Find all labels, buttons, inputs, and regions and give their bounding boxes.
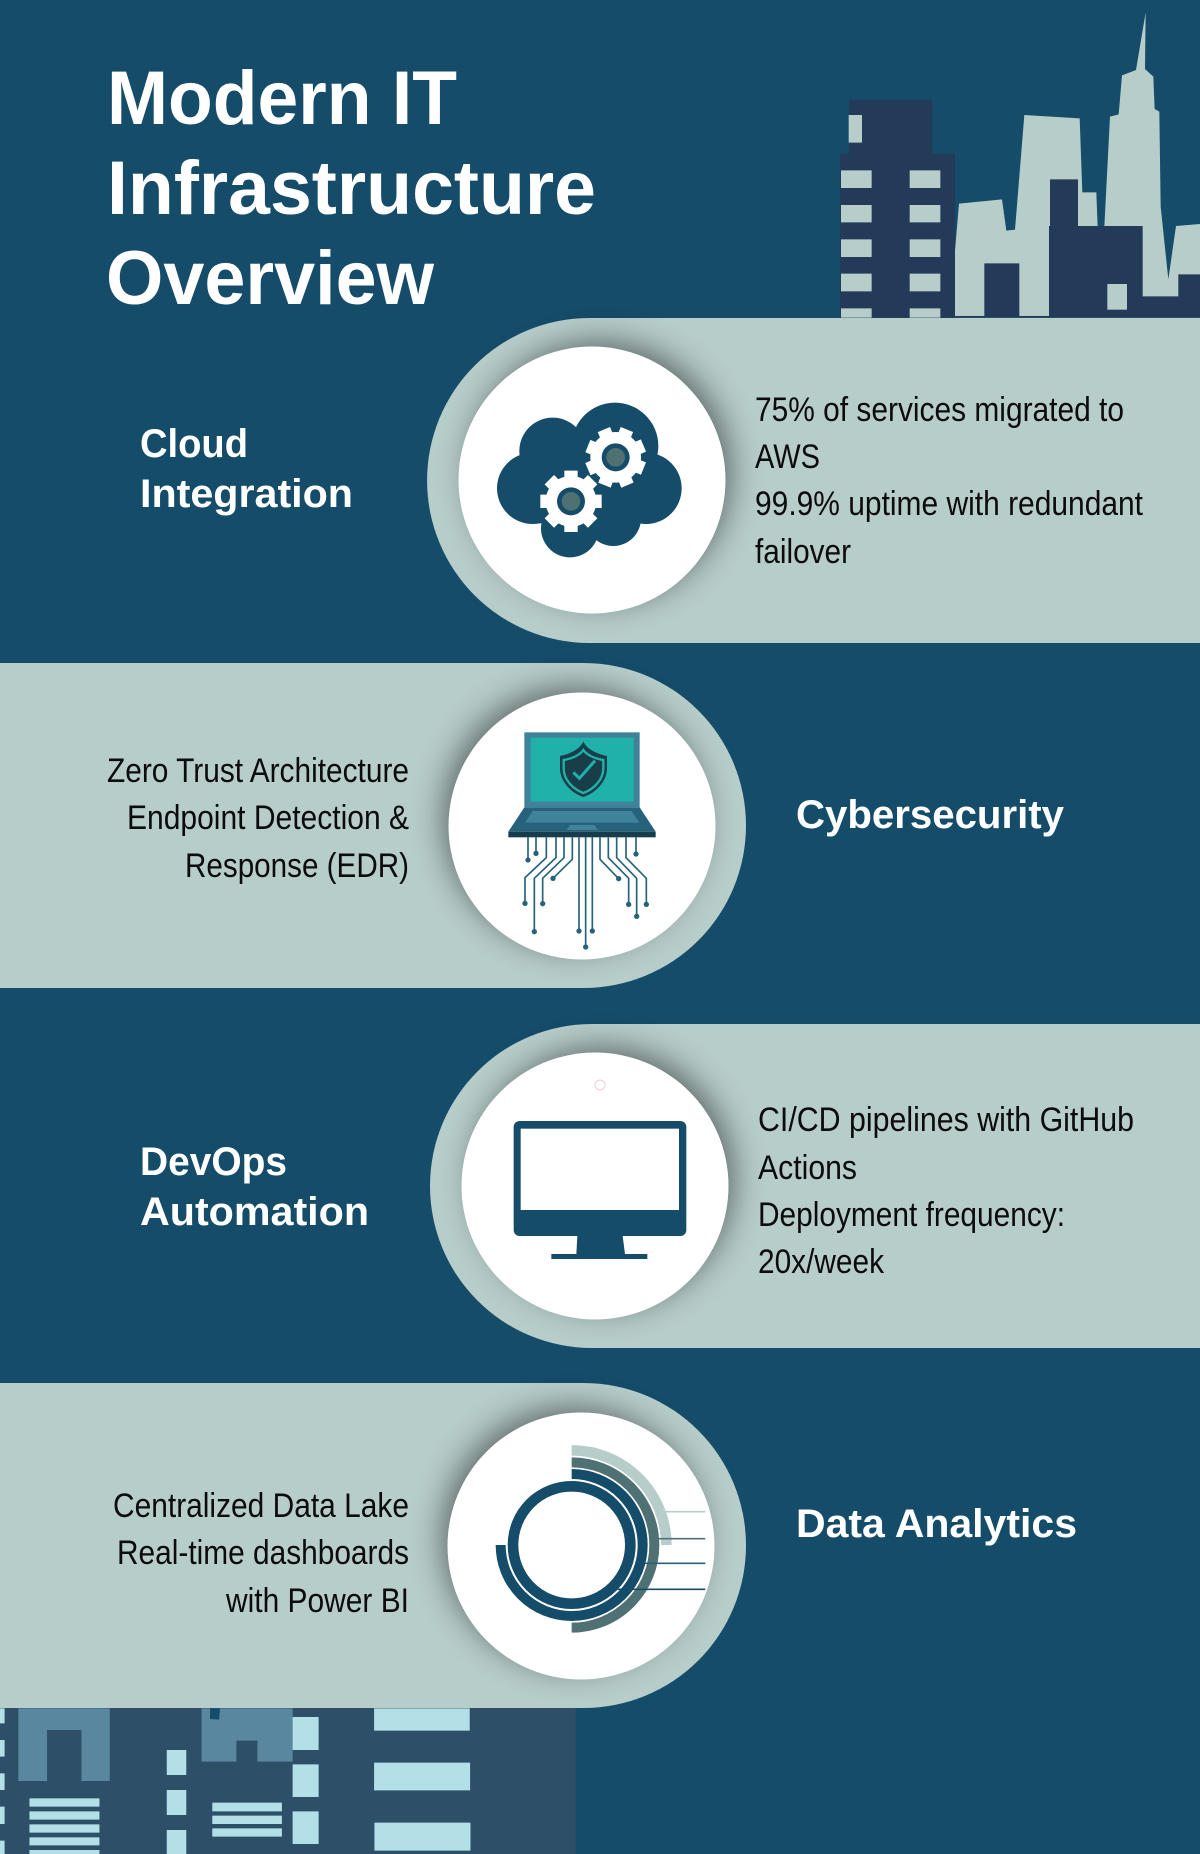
text: devops details: CI/CD pipelines with GitHub (758, 1101, 1134, 1139)
text: cybersecurity details: Endpoint Detection & (127, 799, 409, 837)
text: data analytics details: Centralized Data Lake (113, 1487, 409, 1525)
text: data analytics details (113, 1487, 409, 1620)
panel: data analytics (0, 1383, 1077, 1708)
circle (462, 1052, 728, 1320)
text: cybersecurity details: Response (EDR) (185, 847, 409, 885)
title: Modern IT (107, 56, 457, 141)
panel: cloud integration (140, 318, 1200, 643)
icon: laptop with shield and circuits (508, 732, 656, 950)
circle shadow (470, 342, 730, 602)
chart: radial progress rings (501, 1450, 705, 1628)
heading: devops automation: Automation (140, 1190, 369, 1234)
city strip bottom left (0, 1707, 576, 1854)
circle shadow (444, 688, 704, 948)
text: cloud integration details: 75% of services migrated to (755, 391, 1124, 429)
panel: devops automation (140, 1024, 1200, 1348)
heading: cloud integration: Cloud (140, 422, 248, 466)
heading: cybersecurity: Cybersecurity (796, 793, 1065, 837)
skyline illustration top right (840, 12, 1200, 318)
text: cybersecurity details (107, 752, 409, 885)
heading: devops automation: DevOps (140, 1140, 287, 1184)
band: data analytics (0, 1383, 746, 1708)
text: cloud integration details (755, 391, 1143, 571)
text: devops details: Actions (758, 1149, 857, 1187)
heading: cloud integration (140, 422, 353, 516)
heading: data analytics: Data Analytics (796, 1502, 1077, 1546)
heading: devops automation (140, 1140, 369, 1234)
text: devops details (758, 1101, 1134, 1281)
band: cybersecurity (0, 663, 746, 988)
icon: cloud with gears (497, 403, 682, 557)
title: Infrastructure (107, 146, 596, 231)
circle shadow (473, 1048, 733, 1308)
circle (448, 692, 716, 960)
band: cloud integration (427, 318, 1200, 643)
icon: desktop monitor (514, 1080, 686, 1259)
text: cloud integration details: failover (755, 533, 851, 571)
circle (448, 1412, 714, 1680)
heading: cloud integration: Integration (140, 472, 353, 516)
title: Overview (106, 236, 435, 321)
band: devops automation (430, 1024, 1200, 1348)
panel: cybersecurity (0, 663, 1065, 988)
text: data analytics details: Real-time dashboards (117, 1534, 409, 1572)
text: data analytics details: with Power BI (225, 1582, 409, 1620)
text: devops details: 20x/week (758, 1243, 885, 1281)
text: devops details: Deployment frequency: (758, 1196, 1065, 1234)
title (106, 56, 596, 321)
text: cloud integration details: AWS (755, 438, 820, 476)
circle shadow (443, 1408, 703, 1668)
circle (458, 346, 726, 614)
text: cybersecurity details: Zero Trust Architecture (107, 752, 409, 790)
text: cloud integration details: 99.9% uptime with redundant (755, 485, 1143, 523)
